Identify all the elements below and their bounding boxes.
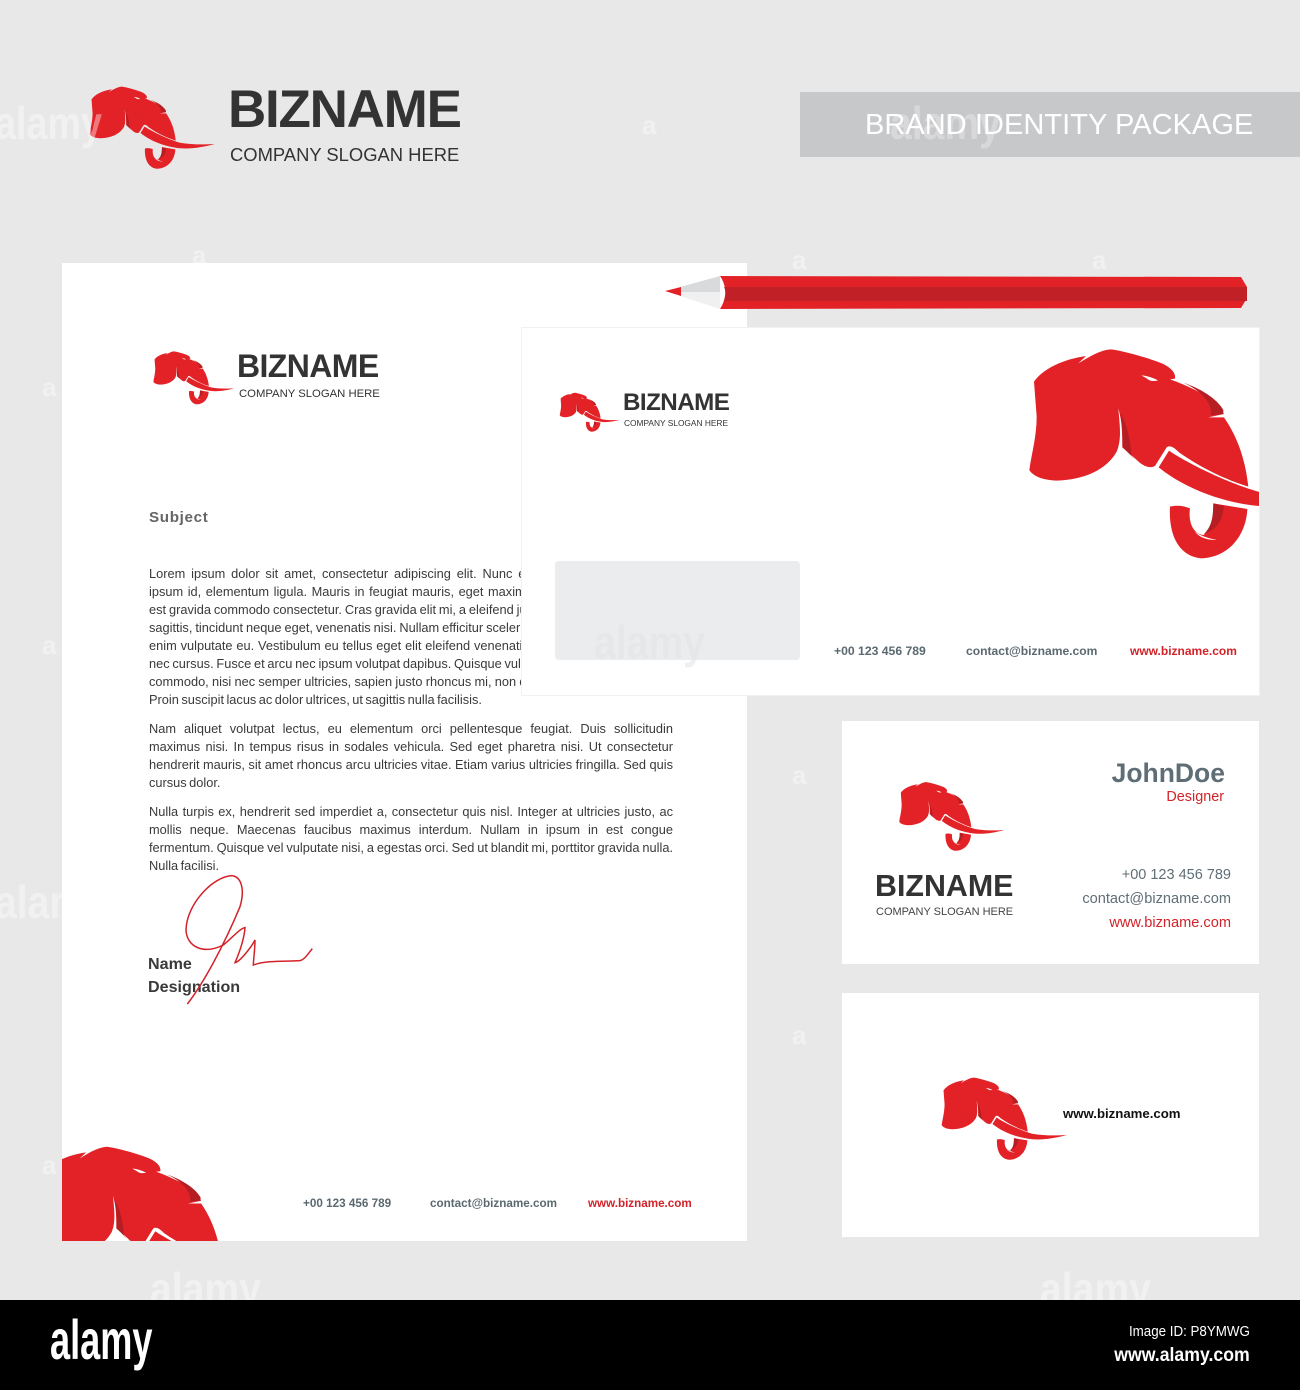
envelope phone: +00 123 456 789	[834, 644, 926, 658]
letterhead subject: Subject	[149, 509, 208, 526]
watermarks: alamy	[890, 97, 1001, 149]
header brand name: BIZNAME	[228, 80, 461, 139]
envelope website: www.bizname.com	[1130, 644, 1237, 658]
card back website: www.bizname.com	[1063, 1106, 1180, 1121]
card back elephant	[942, 1078, 1067, 1160]
card person name: JohnDoe	[1112, 758, 1225, 788]
signature	[185, 874, 313, 1004]
card person title: Designer	[1166, 789, 1224, 805]
footer site: www.alamy.com	[1114, 1345, 1250, 1366]
footer bar	[0, 1300, 1300, 1390]
watermarks: a	[42, 630, 56, 660]
text: Nam aliquet volutpat lectus, eu elementum orci pellentesque feugiat. Duis sollicitudin	[149, 721, 673, 736]
watermarks: a	[192, 240, 206, 270]
header logo icon: elephant	[90, 86, 215, 169]
watermarks: a	[792, 245, 806, 275]
card logo icon	[899, 782, 1004, 851]
letterhead name and designation	[148, 955, 240, 996]
text: nec cursus. Fusce et arcu nec ipsum volutpat dapibus. Quisque vulputate ipsum vitae et	[149, 656, 637, 671]
watermarks: a	[42, 372, 56, 402]
text: cursus dolor.	[149, 775, 220, 790]
watermarks: a	[42, 1150, 56, 1180]
card email: contact@bizname.com	[1082, 891, 1231, 907]
text: maximus nisi. In tempus risus in sodales vehicula. Sed eget pharetra nisi. Ut consectetur	[149, 739, 673, 754]
letterhead body text	[149, 566, 673, 873]
text: sagittis, tincidunt neque eget, venenatis nisi. Nullam efficitur scelerisque mi, vel ligula	[149, 620, 623, 635]
panel: business card front	[842, 721, 1259, 964]
text: enim vulputate eu. Vestibulum eu tellus eget elit eleifend venenatis quis nec massa at	[149, 638, 637, 653]
card slogan: COMPANY SLOGAN HERE	[876, 906, 1013, 918]
footer image id: Image ID: P8YMWG	[1129, 1323, 1250, 1340]
banner: brand identity package: BRAND IDENTITY PACKAGE	[865, 109, 1253, 141]
envelope logo icon	[560, 392, 619, 432]
letterhead slogan: COMPANY SLOGAN HERE	[239, 388, 380, 400]
text: fermentum. Quisque vel vulputate nisi, a egestas orci. Sed ut blandit mi, porttitor gravida nulla.	[149, 840, 673, 855]
text: Proin suscipit lacus ac dolor ultrices, ut sagittis nulla facilisis.	[149, 692, 482, 707]
text: commodo, nisi nec semper ultricies, sapien justo rhoncus mi, non dictum est erat at mi	[149, 674, 633, 689]
watermarks: a	[1092, 245, 1106, 275]
letterhead footer phone: +00 123 456 789	[303, 1197, 391, 1210]
letterhead footer website: www.bizname.com	[588, 1197, 692, 1210]
envelope slogan: COMPANY SLOGAN HERE	[624, 418, 728, 428]
text: Lorem ipsum dolor sit amet, consectetur adipiscing elit. Nunc efficitur bibendum nunc	[149, 566, 655, 581]
header slogan: COMPANY SLOGAN HERE	[230, 144, 459, 165]
letterhead name and designation: Designation	[148, 978, 240, 996]
card website: www.bizname.com	[1109, 915, 1231, 931]
letterhead name and designation: Name	[148, 955, 192, 973]
pencil	[665, 276, 1247, 309]
envelope email: contact@bizname.com	[966, 644, 1097, 658]
text: hendrerit mauris, sit amet rhoncus arcu ultricies vitae. Etiam varius ultricies fringilla. Sed quis	[149, 757, 673, 772]
panel: business card back	[842, 993, 1259, 1237]
text: est gravida commodo consectetur. Cras gravida elit mi, a eleifend justo aliquet at tellus	[149, 602, 631, 617]
letterhead logo icon	[153, 351, 234, 404]
card brand name: BIZNAME	[875, 869, 1013, 903]
footer alamy logo: alamy	[50, 1308, 152, 1371]
panel: envelope	[522, 328, 1259, 695]
text: ipsum id, elementum ligula. Mauris in feugiat mauris, eget maximus lorem vitae nisi sed	[149, 584, 656, 599]
watermarks: a	[792, 1020, 806, 1050]
watermarks: a	[792, 760, 806, 790]
text: Nulla turpis ex, hendrerit sed imperdiet a, consectetur quis nisl. Integer at ultricies justo, ac	[149, 804, 673, 819]
panel: letterhead	[62, 263, 747, 1241]
card phone: +00 123 456 789	[1122, 867, 1231, 883]
text: mollis neque. Maecenas faucibus maximus interdum. Nullam in ipsum in est congue	[149, 822, 673, 837]
letterhead footer email: contact@bizname.com	[430, 1197, 557, 1210]
letterhead brand name: BIZNAME	[237, 348, 379, 384]
banner: brand identity package	[800, 92, 1300, 157]
watermarks: a	[642, 110, 656, 140]
watermarks: alamy	[594, 616, 705, 668]
text: Nulla facilisi.	[149, 858, 219, 873]
letterhead corner elephant	[62, 1146, 218, 1241]
envelope window	[555, 561, 800, 660]
envelope large elephant	[1029, 349, 1259, 558]
envelope brand name: BIZNAME	[623, 389, 729, 416]
